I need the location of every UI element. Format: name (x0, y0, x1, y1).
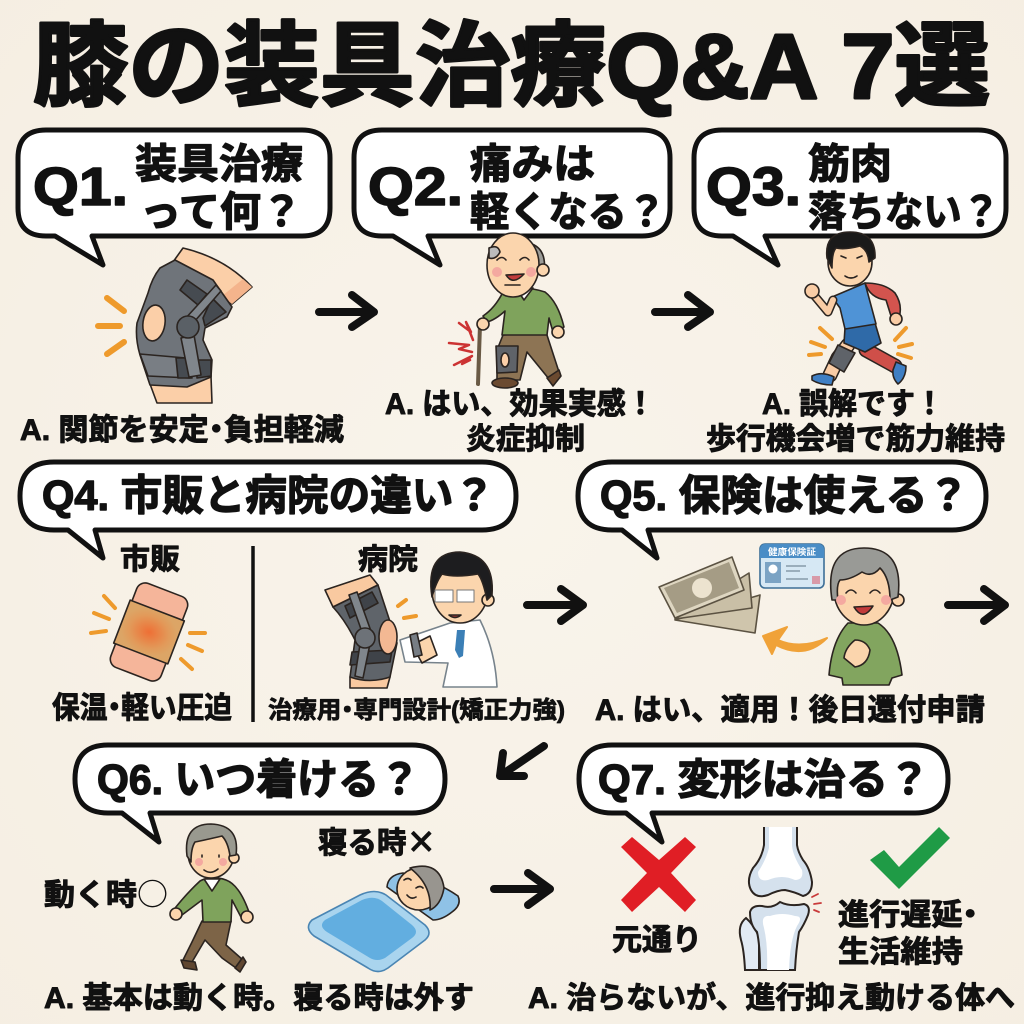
question Q1: って何？ (140, 189, 302, 235)
icon: green check (870, 827, 950, 889)
answer Q2: A. はい、効果実感！ (385, 388, 655, 421)
femur (749, 827, 812, 896)
answer Q3 (706, 388, 1005, 456)
front leg (830, 345, 848, 375)
question Q5: Q5. 保険は使える？ (600, 472, 969, 519)
answer: 病院: 治療用・専門設計(矯正力強) (268, 697, 565, 724)
question Q3: Q3. (706, 157, 801, 217)
icon: pain marks (812, 894, 821, 912)
question Q1: 装具治療 (135, 141, 303, 187)
arrow: Q1 to Q2 (319, 295, 374, 327)
label: progress (838, 899, 978, 969)
label: 市販: 市販 (120, 543, 180, 576)
question Q3: 落ちない？ (808, 189, 1000, 235)
speech bubble Q5 (578, 462, 986, 558)
icon: refund arrow (763, 627, 827, 654)
answer Q3: 歩行機会増で筋力維持 (706, 423, 1005, 456)
icon: sleeping person (308, 866, 459, 972)
icon: old man with cane (477, 233, 564, 388)
speech bubble Q4 (20, 462, 516, 558)
icon: orange rays (91, 596, 205, 669)
label: progress: 進行遅延・ (838, 899, 978, 932)
speech bubble Q3 (694, 130, 1006, 265)
panel: Q4 (20, 462, 565, 725)
arrow: Q6 to Q7 (494, 873, 550, 905)
arrow: Q4 to Q5 (527, 589, 583, 621)
question Q3 (706, 141, 1000, 235)
icon: running man (805, 232, 906, 385)
question Q2: 痛みは (470, 141, 595, 187)
tibia (750, 902, 809, 970)
answer Q2 (385, 388, 655, 456)
speech bubble Q6 (75, 745, 445, 842)
arrow: Q5 down to Q6 (500, 746, 544, 776)
title: 膝の装具治療Q&A 7選 (33, 16, 990, 118)
icon: banknotes (659, 557, 760, 633)
icon: orange rays (809, 328, 912, 358)
speech bubble Q2 (354, 130, 670, 265)
question Q2: 軽くなる？ (470, 189, 666, 235)
icon: smiling elderly man (829, 548, 904, 685)
icon: walking elderly man (170, 824, 253, 972)
icon: knee joint bones (740, 827, 812, 970)
answer Q2: 炎症抑制 (466, 423, 585, 456)
question Q7: Q7. 変形は治る？ (598, 756, 930, 803)
answer Q5: A. はい、適用！後日還付申請 (595, 694, 985, 727)
question Q1: Q1. (33, 157, 128, 217)
question Q2 (368, 141, 666, 235)
speech bubble Q7 (579, 745, 948, 842)
question Q2: Q2. (368, 157, 463, 217)
label: moving OK: 動く時○ (44, 870, 168, 914)
panel: Q6 (44, 745, 474, 1015)
fibula (740, 918, 759, 970)
arrow: Q2 to Q3 (655, 295, 710, 327)
panel: Q2 (354, 130, 670, 456)
question Q4: Q4. 市販と病院の違い？ (42, 472, 495, 519)
icon: pain bolts (449, 322, 473, 365)
speech bubble Q1 (18, 130, 330, 265)
panel: Q5 (578, 462, 986, 727)
icon: knee brace (136, 248, 252, 403)
label: 元通り: 元通り (612, 924, 702, 957)
question Q1 (33, 141, 303, 235)
arrow: Q5 to Q6 (948, 589, 1005, 621)
icon: red cross (621, 837, 696, 912)
answer Q1: A. 関節を安定・負担軽減 (20, 414, 344, 447)
icon: orange rays (398, 600, 416, 618)
back leg (866, 350, 895, 366)
panel: Q7 (528, 745, 1015, 1015)
label: 病院: 病院 (358, 543, 418, 576)
icon: heat pack (106, 580, 192, 684)
answer Q6: A. 基本は動く時。寝る時は外す (44, 982, 474, 1015)
panel: Q3 (694, 130, 1006, 456)
label: progress: 生活維持 (838, 936, 963, 969)
answer Q3: A. 誤解です！ (762, 388, 944, 421)
icon: doctor (400, 552, 497, 687)
answer Q7: A. 治らないが、進行抑え動ける体へ (528, 981, 1015, 1015)
icon: insurance card (760, 544, 824, 588)
divider between options (251, 546, 255, 722)
question Q6: Q6. いつ着ける？ (97, 756, 420, 803)
label: sleeping no: 寝る時× (318, 818, 436, 862)
question Q3: 筋肉 (808, 141, 892, 187)
icon: insurance card: 健康保険証 (768, 546, 816, 557)
icon: orange rays (98, 298, 124, 354)
icon: hospital knee brace (325, 575, 397, 688)
panel: Q1 (18, 130, 344, 447)
answer: 市販: 保温・軽い圧迫 (52, 692, 232, 725)
